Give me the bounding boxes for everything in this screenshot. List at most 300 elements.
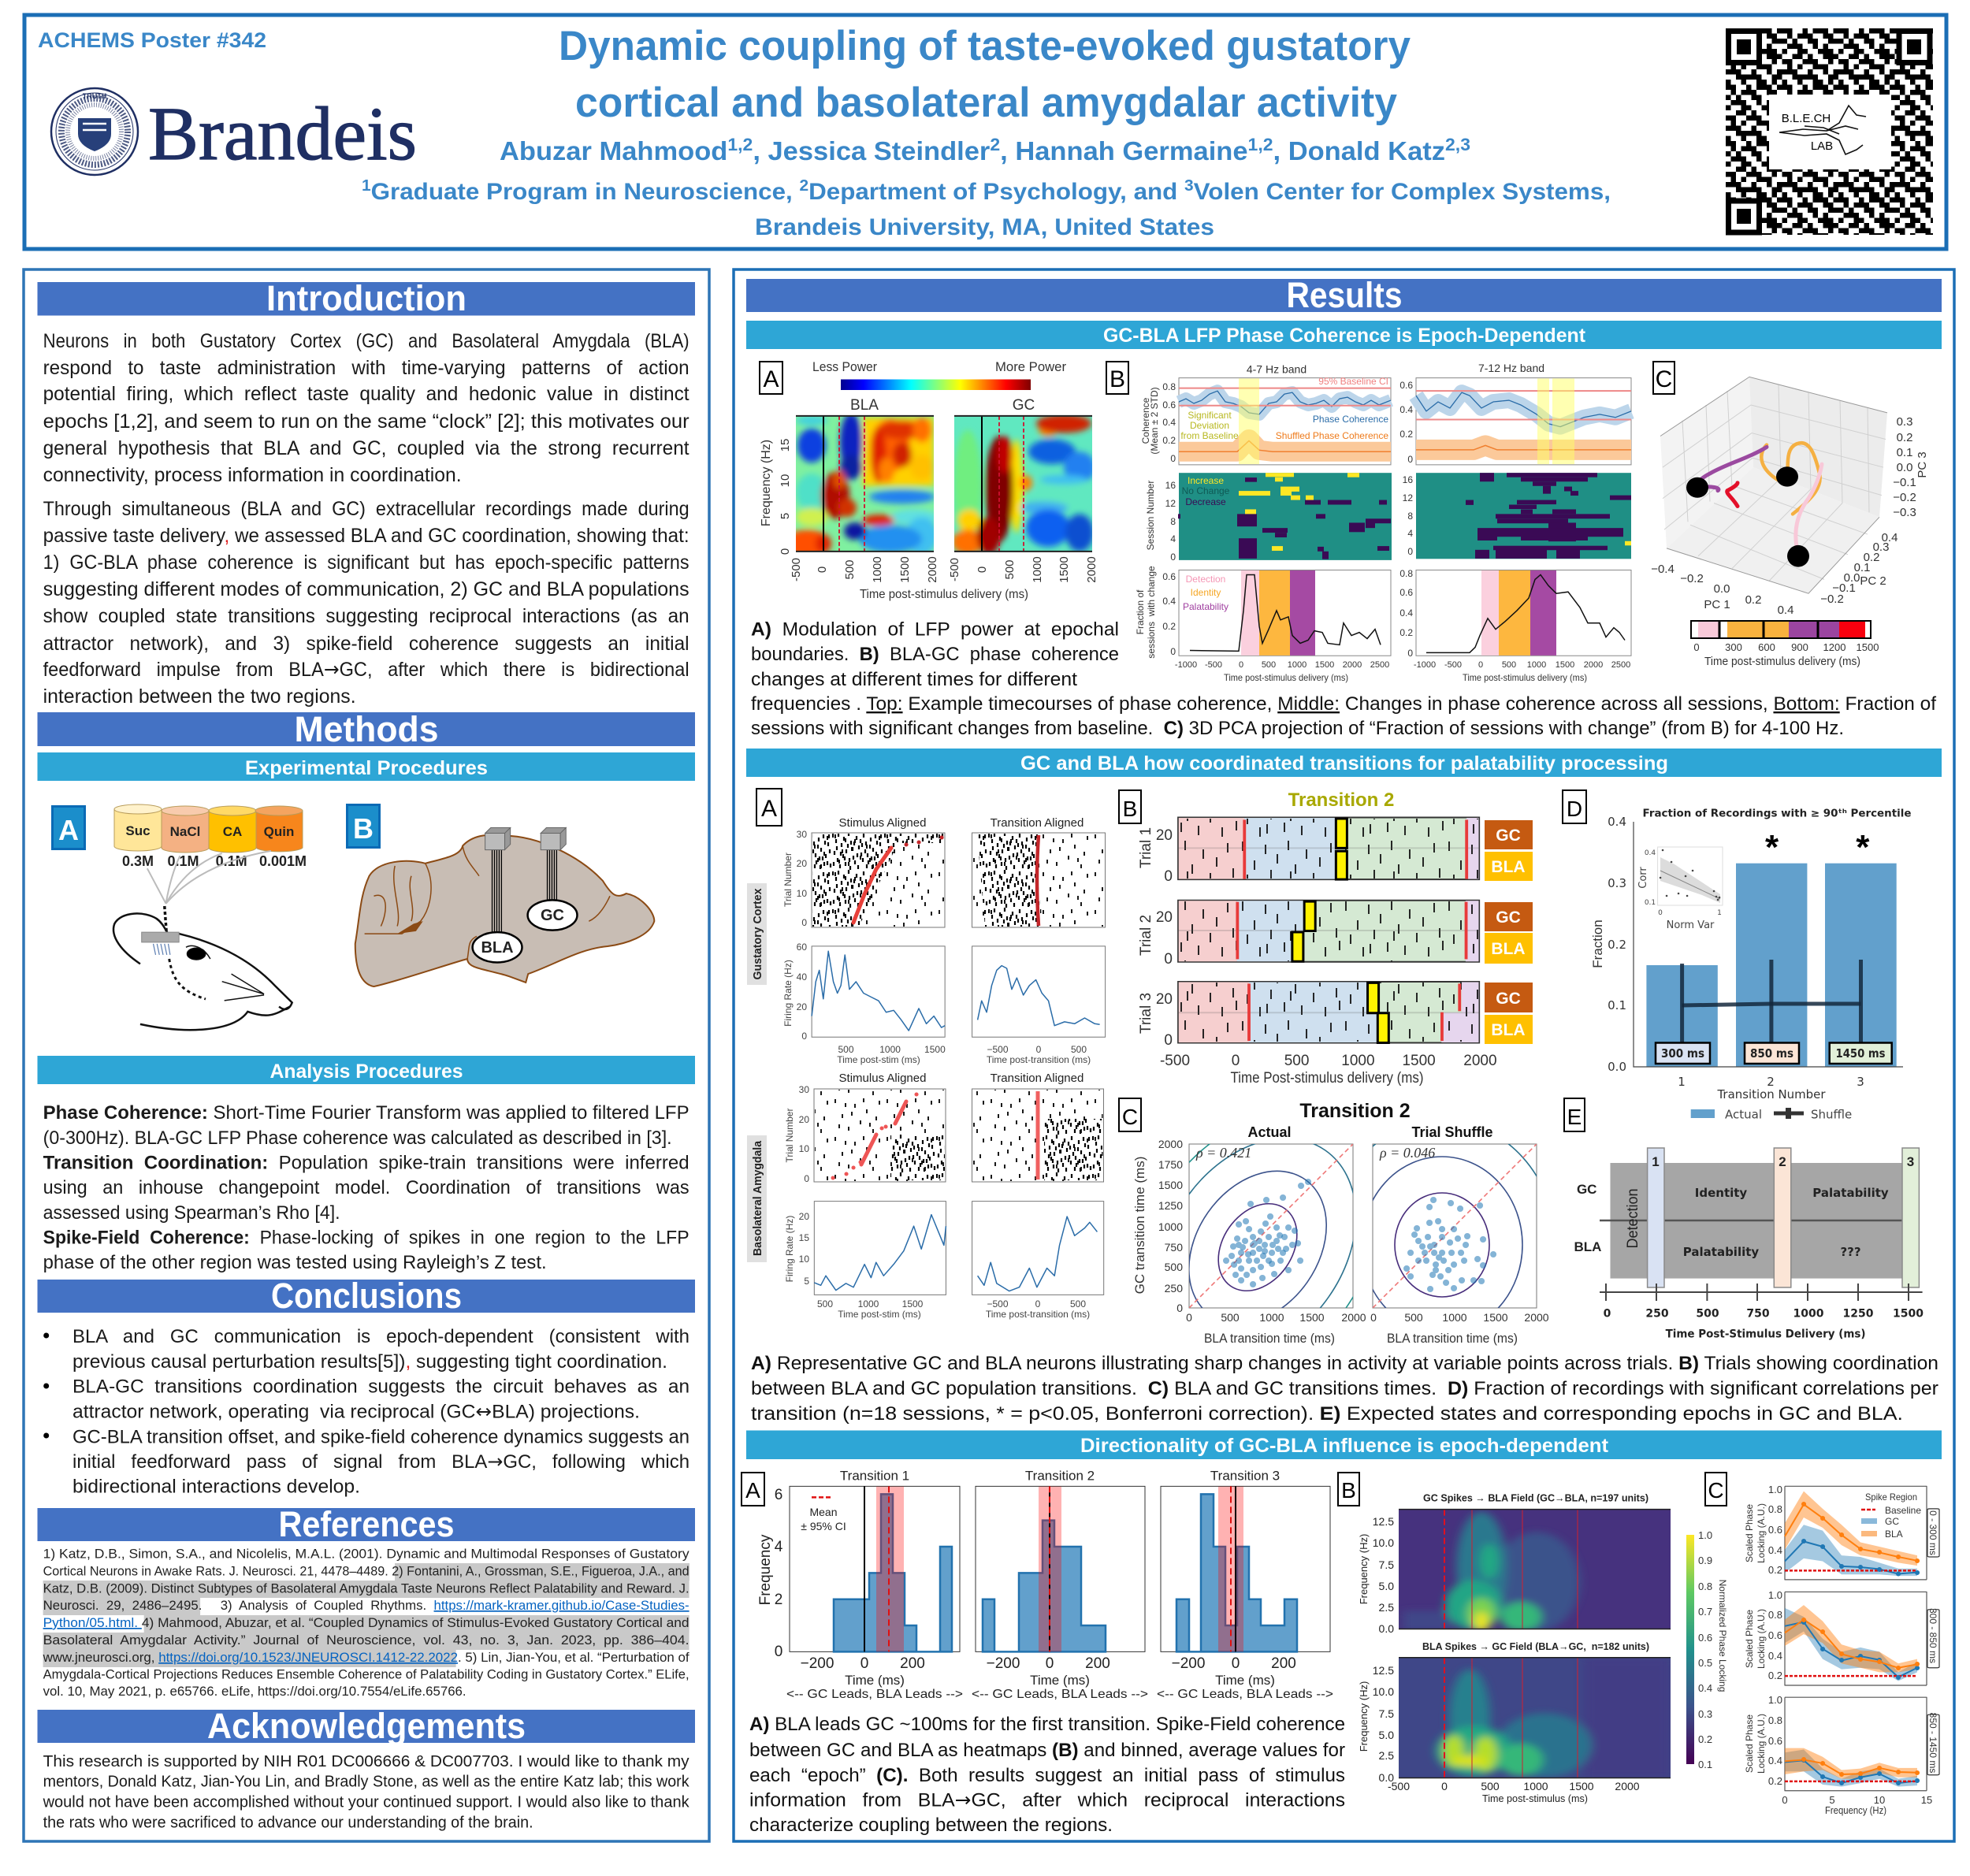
figure: taste delivery rat bbox=[52, 804, 307, 1030]
text: introduction: suggesting different modes of communication, 2) GC and BLA populations bbox=[43, 578, 690, 600]
line plot text and legend: 15 bbox=[1921, 1794, 1932, 1806]
line plot text and legend: 10 bbox=[1874, 1794, 1885, 1806]
text: introduction: general hypothesis that BLA and GC, coupled via the strong recurrent bbox=[43, 437, 690, 459]
line plot text and legend: 0.8 bbox=[1768, 1609, 1782, 1621]
figure 2A: neuron rasters bbox=[747, 789, 1106, 1320]
line plot text and legend: Baseline bbox=[1885, 1505, 1921, 1516]
epoch colorbar: 1200 bbox=[1823, 641, 1845, 653]
heading: introduction bbox=[38, 278, 695, 318]
trial axes text: 0 bbox=[1232, 1053, 1240, 1069]
caption: section 2: transition (n=18 sessions, * = p<0.05, Bonferroni correction). E) Expected states and corresponding epochs in GC and BLA. bbox=[751, 1403, 1903, 1425]
axis labels for heatmaps: 500 bbox=[843, 559, 857, 580]
trial axes text: 20 bbox=[1156, 909, 1173, 926]
affiliations bbox=[362, 177, 1611, 240]
axis text for rasters: 0 bbox=[801, 917, 807, 928]
legend: Shuffle bbox=[1811, 1108, 1852, 1122]
labels for panel B: 1000 bbox=[1288, 660, 1307, 670]
caption: section 3: information from BLA →GC, after which reciprocal interactions bbox=[749, 1789, 1345, 1811]
text: analysis procedures: using an inhouse changepoint model. Coordination of transitions was bbox=[43, 1177, 690, 1198]
line plot text and legend: 300 - 850 ms bbox=[1927, 1608, 1938, 1663]
labels for panel B: 8 bbox=[1407, 511, 1413, 522]
axis text for rasters: 10 bbox=[799, 1254, 809, 1265]
axis labels for heatmaps: 1500 bbox=[1057, 556, 1071, 583]
heatmap text: 12.5 bbox=[1373, 1664, 1394, 1677]
taste cylinders: 0.3M bbox=[122, 853, 154, 869]
labels for panel B: 1500 bbox=[1556, 660, 1574, 670]
affiliations: Volen Center for Complex Systems, bbox=[1194, 179, 1611, 205]
text: introduction: connectivity, process information in coordination. bbox=[43, 464, 462, 486]
BLA heatmap bbox=[796, 414, 934, 552]
time axis: 750 bbox=[1746, 1308, 1770, 1321]
axis text for rasters: 0 bbox=[1035, 1298, 1041, 1309]
PCA axis labels: 0.2 bbox=[1745, 593, 1761, 607]
label A bbox=[760, 362, 782, 394]
affiliations: Graduate Program in Neuroscience, bbox=[371, 179, 799, 205]
legend bbox=[1691, 1108, 1852, 1122]
axis text for rasters bbox=[782, 816, 1091, 1320]
taste cylinders: CA bbox=[223, 824, 242, 839]
title: Dynamic coupling of taste-evoked gustatory bbox=[559, 23, 1411, 69]
figure 1A: LFP power heatmaps bbox=[760, 359, 1098, 601]
epoch time labels: 300 ms bbox=[1661, 1046, 1704, 1061]
labels for panel B: 4 bbox=[1170, 533, 1176, 544]
subheading: coordinated transitions: GC and BLA how coordinated transitions for palatability processing bbox=[1020, 752, 1668, 775]
affiliations: 2 bbox=[799, 177, 808, 195]
heatmap text: Time post-stimulus (ms) bbox=[1482, 1792, 1588, 1804]
label A: A bbox=[58, 814, 79, 846]
labels for panel B: 0.4 bbox=[1162, 596, 1176, 607]
line plot text and legend: Locking (A.U.) bbox=[1756, 1503, 1767, 1563]
text: conclusions list: previous causal perturbation results[5]) , suggesting tight coordination. bbox=[72, 1351, 667, 1373]
labels for panel B: Deviation bbox=[1190, 420, 1229, 431]
normalized phase locking colorbar: 0.9 bbox=[1698, 1555, 1712, 1566]
title: transition 2: Transition 2 bbox=[1288, 789, 1394, 811]
histogram text: −200 bbox=[801, 1655, 834, 1672]
heatmap text: 1000 bbox=[1523, 1780, 1548, 1792]
axis text for rasters: Firing Rate (Hz) bbox=[782, 960, 794, 1027]
labels for panel B: 0.2 bbox=[1399, 627, 1413, 638]
scatter axes text: 1500 bbox=[1158, 1179, 1183, 1191]
axis text for rasters: 1500 bbox=[902, 1298, 924, 1309]
heatmap text: BLA Spikes → GC Field (BLA→GC, n=182 units) bbox=[1422, 1640, 1649, 1652]
caption: section 3: between GC and BLA as heatmaps (B) and binned, average values for bbox=[749, 1740, 1345, 1761]
histogram text: ± 95% CI bbox=[801, 1520, 846, 1532]
heatmap text: 1500 bbox=[1569, 1780, 1594, 1792]
trial axes text: -500 bbox=[1160, 1053, 1190, 1069]
GC/BLA tags: GC bbox=[1496, 990, 1521, 1008]
labels for panel B: 0 bbox=[1478, 660, 1483, 670]
heading: acknowledgements: Acknowledgements bbox=[207, 1706, 526, 1746]
label B: B bbox=[1110, 366, 1125, 392]
labels for panel B: 12 bbox=[1403, 492, 1413, 503]
text: references: www.jneurosci.org, https://doi.org/10.1523/JNEUROSCI.1412-22.2022. 5) Lin, Jian-You, et al. “Perturbation of bbox=[43, 1650, 690, 1665]
figure 2E: epoch schematic bbox=[1564, 1098, 1924, 1341]
label A: A bbox=[761, 796, 777, 822]
labels for panel B: 2000 bbox=[1584, 660, 1603, 670]
axis text for rasters: Time post-stim (ms) bbox=[838, 1309, 921, 1320]
taste cylinders: NaCl bbox=[170, 824, 200, 839]
histogram text: 0 bbox=[775, 1644, 782, 1660]
scatter axes text bbox=[1132, 1138, 1549, 1346]
line plot text and legend: 0 bbox=[1782, 1794, 1788, 1806]
histograms bbox=[790, 1486, 1330, 1651]
affiliations: 3 bbox=[1184, 177, 1194, 195]
labels for panel B: 0.4 bbox=[1162, 417, 1176, 428]
line plot text and legend: Locking (A.U.) bbox=[1756, 1714, 1767, 1774]
scatter axes text: 1500 bbox=[1299, 1311, 1325, 1324]
label B: B bbox=[1123, 797, 1137, 821]
text: introduction: show coupled state transitions suggesting reciprocal interactions (as an bbox=[43, 605, 690, 627]
labels for panel B: 0.8 bbox=[1162, 381, 1176, 392]
scatter titles: Trial Shuffle bbox=[1411, 1124, 1493, 1140]
rat with tubes and electrode bbox=[113, 851, 292, 1030]
text: acknowledgements: mentors, Donald Katz, Jian-You Lin, and Bradly Stone, as well as the entire Katz lab; this work bbox=[43, 1773, 690, 1790]
text: conclusions list: BLA-GC transitions coordination suggests the circuit behaves as an bbox=[72, 1376, 690, 1398]
text: analysis procedures: assessed using Spearman’s Rho [4]. bbox=[43, 1202, 340, 1224]
text: introduction: respond to taste administration with time-varying patterns of action bbox=[43, 357, 690, 379]
heatmap text: 7.5 bbox=[1379, 1707, 1394, 1720]
inset correlation plot: 0.4 bbox=[1645, 849, 1656, 857]
line plot text and legend: 0.2 bbox=[1768, 1775, 1782, 1787]
normalized phase locking colorbar: 1.0 bbox=[1698, 1529, 1712, 1541]
axis labels for heatmaps: Frequency (Hz) bbox=[760, 440, 773, 526]
histogram text: 200 bbox=[1271, 1655, 1296, 1672]
line plot text and legend: 0.6 bbox=[1768, 1629, 1782, 1641]
label C bbox=[1705, 1473, 1727, 1506]
axis text for rasters: 20 bbox=[799, 1211, 809, 1222]
labels for panel B: 500 bbox=[1502, 660, 1516, 670]
label B: B bbox=[1341, 1478, 1356, 1503]
QR code: LAB bbox=[1811, 139, 1833, 153]
labels for panel B: 0.2 bbox=[1399, 429, 1413, 440]
epoch blocks: Identity bbox=[1695, 1186, 1747, 1200]
axis text: 3 bbox=[1857, 1075, 1864, 1089]
text: references: 1) Katz, D.B., Simon, S.A., and Nicolelis, M.A.L. (2001). Dynamic and Multimodal Responses of Gustatory bbox=[43, 1546, 690, 1562]
labels for panel B: 16 bbox=[1165, 480, 1176, 491]
authors: , Jessica Steindler bbox=[753, 136, 991, 165]
histogram text: Time (ms) bbox=[1215, 1673, 1275, 1688]
actual scatter bbox=[1188, 1144, 1354, 1308]
labels for panel B: 0.8 bbox=[1399, 568, 1413, 579]
axis text for rasters: 5 bbox=[804, 1276, 809, 1287]
figure: brain with electrodes bbox=[347, 805, 654, 986]
text: analysis procedures bbox=[43, 1102, 690, 1273]
text: conclusions list bbox=[43, 1326, 690, 1497]
heatmap text: 12.5 bbox=[1373, 1515, 1394, 1528]
trial axes text: 20 bbox=[1156, 827, 1173, 844]
epoch blocks: GC bbox=[1577, 1182, 1596, 1197]
session change rasters bbox=[1178, 473, 1631, 560]
labels for panel B: 500 bbox=[1262, 660, 1276, 670]
line plot text and legend: Locking (A.U.) bbox=[1756, 1609, 1767, 1669]
histogram text: 0 bbox=[1232, 1655, 1240, 1672]
GC/BLA tags: BLA bbox=[1491, 1021, 1526, 1039]
subheading: experimental procedures bbox=[38, 752, 695, 781]
normalized phase locking colorbar: 0.8 bbox=[1698, 1581, 1712, 1592]
caption: section 2: between BLA and GC population transitions. C) BLA and GC transitions times. D) Fraction of recordings with significant correlations per bbox=[751, 1378, 1938, 1399]
line plot text and legend: Scaled Phase bbox=[1744, 1504, 1755, 1562]
labels for panel B: 2000 bbox=[1343, 660, 1362, 670]
trial axes text: Trial 2 bbox=[1138, 915, 1154, 956]
heading: results bbox=[746, 275, 1942, 315]
scatter axes text: BLA transition time (ms) bbox=[1387, 1331, 1518, 1346]
histogram text: Transition 3 bbox=[1210, 1469, 1280, 1483]
axis text for rasters: −500 bbox=[987, 1044, 1009, 1055]
axis text for rasters: 10 bbox=[797, 888, 807, 899]
label C bbox=[1119, 1098, 1141, 1131]
poster number: ACHEMS Poster #342 bbox=[38, 28, 266, 52]
axis text: 1 bbox=[1678, 1075, 1686, 1089]
labels for panel B: Significant bbox=[1188, 410, 1232, 421]
time axis: Time Post-Stimulus Delivery (ms) bbox=[1666, 1328, 1866, 1341]
labels for panel B: 0.6 bbox=[1162, 399, 1176, 410]
heatmap text: 0.0 bbox=[1379, 1622, 1394, 1635]
label B bbox=[1338, 1473, 1359, 1506]
labels for panel B bbox=[1135, 362, 1630, 683]
icon: Brandeis seal: TRUTH bbox=[83, 92, 106, 100]
histogram text: Time (ms) bbox=[1030, 1673, 1090, 1688]
coherence timecourses bbox=[1179, 378, 1631, 465]
heatmap text: 0.0 bbox=[1379, 1771, 1394, 1784]
axis text: 0.2 bbox=[1608, 938, 1626, 952]
axis text for rasters: 20 bbox=[799, 1114, 809, 1125]
labels for panel B: sessions with change bbox=[1146, 566, 1157, 659]
trial axes text: Time Post-stimulus delivery (ms) bbox=[1231, 1070, 1423, 1087]
figure 2B: trial transitions bbox=[1119, 789, 1533, 1087]
text: conclusions list: bidirectional interactions develop. bbox=[72, 1477, 360, 1497]
labels for panel B: 0 bbox=[1170, 646, 1176, 657]
normalized phase locking colorbar: 0.5 bbox=[1698, 1657, 1712, 1669]
normalized phase locking colorbar: 0.3 bbox=[1698, 1708, 1712, 1720]
text: analysis procedures: Spike-Field Coherence: Phase-locking of spikes in one region to the LFP bbox=[43, 1228, 690, 1248]
scatter axes text: 1500 bbox=[1483, 1311, 1508, 1324]
labels for panel B: Decrease bbox=[1185, 496, 1226, 507]
trial plots bbox=[1178, 818, 1479, 1043]
caption: section 1 bbox=[751, 619, 1936, 739]
authors: 1,2 bbox=[727, 135, 753, 154]
subheading: phase coherence: GC-BLA LFP Phase Coherence is Epoch-Dependent bbox=[1103, 325, 1586, 347]
label C bbox=[1653, 362, 1674, 394]
label B: B bbox=[353, 812, 374, 845]
epoch blocks bbox=[1574, 1148, 1920, 1287]
text: conclusions list: BLA and GC communication is epoch-dependent (consistent with bbox=[72, 1326, 690, 1347]
normalized phase locking colorbar: 0.7 bbox=[1698, 1606, 1712, 1618]
line plot text and legend: Scaled Phase bbox=[1744, 1610, 1755, 1668]
GC to BLA heatmap bbox=[1399, 1510, 1671, 1633]
text: conclusions list: GC-BLA transition offset, and spike-field coherence dynamics suggests an bbox=[72, 1426, 690, 1448]
subheading: analysis procedures: Analysis Procedures bbox=[269, 1061, 463, 1083]
scatter axes text: 750 bbox=[1165, 1241, 1183, 1254]
labels for panel B: 0 bbox=[1407, 454, 1413, 465]
text: references: Neurosci. 29, 2486–2495. 3) Analysis of Coupled Rhythms. https://mark-kramer.github.io/Case-Studies- bbox=[43, 1598, 690, 1613]
epoch colorbar: 1500 bbox=[1857, 641, 1879, 653]
histogram text: Transition 1 bbox=[840, 1469, 909, 1483]
axis text for rasters: 15 bbox=[799, 1232, 809, 1243]
heatmap text: 0 bbox=[1441, 1780, 1448, 1792]
scatter axes text: ρ = 0.046 bbox=[1379, 1145, 1435, 1161]
normalized phase locking colorbar: 0.1 bbox=[1698, 1759, 1712, 1770]
axis text for rasters: Trial Number bbox=[784, 1109, 795, 1162]
axis text for rasters: 1000 bbox=[879, 1044, 901, 1055]
text: introduction: interaction between the two regions. bbox=[43, 685, 356, 708]
label D bbox=[1563, 790, 1586, 823]
subheading: coordinated transitions bbox=[746, 749, 1942, 777]
GC/BLA tags: GC bbox=[1496, 908, 1521, 927]
caption: section 1: changes at different times for different bbox=[751, 669, 1077, 690]
heading: methods: Methods bbox=[295, 709, 438, 749]
histogram text: −200 bbox=[1172, 1655, 1205, 1672]
PCA axis labels: 0.0 bbox=[1897, 461, 1912, 474]
epoch blocks: 1 bbox=[1652, 1154, 1660, 1169]
trial axes text: 500 bbox=[1284, 1053, 1309, 1069]
text: acknowledgements: would not have been accomplished without your continued support. I would also like to thank bbox=[43, 1793, 690, 1811]
axis text for rasters: 1000 bbox=[858, 1298, 879, 1309]
histogram text: 200 bbox=[900, 1655, 925, 1672]
PCA axis labels: −0.2 bbox=[1680, 572, 1704, 585]
line plot text and legend: 0.4 bbox=[1768, 1755, 1782, 1766]
figure 3B: spike-field heatmaps bbox=[1338, 1473, 1728, 1804]
caption: section 3: each “epoch” (C). Both results suggest an initial pass of stimulus bbox=[749, 1765, 1345, 1786]
taste cylinders: Suc bbox=[125, 823, 151, 838]
axis text for rasters: Stimulus Aligned bbox=[839, 816, 926, 830]
scatter axes text: 500 bbox=[1221, 1311, 1240, 1324]
heading: references: References bbox=[279, 1504, 454, 1544]
figure 3A: lag histograms bbox=[742, 1469, 1333, 1701]
significance stars bbox=[1765, 828, 1870, 867]
labels for panel B: Shuffled Phase Coherence bbox=[1276, 430, 1388, 441]
heatmap text: -500 bbox=[1388, 1780, 1410, 1792]
labels for panel B: 0.6 bbox=[1399, 380, 1413, 391]
labels for panel B: 8 bbox=[1170, 516, 1176, 527]
authors: , Donald Katz bbox=[1273, 136, 1445, 165]
axis text for rasters: Transition Aligned bbox=[991, 1072, 1084, 1085]
PCA axis labels: 0.2 bbox=[1864, 551, 1879, 564]
caption: section 3 bbox=[749, 1714, 1345, 1836]
PCA axis labels: 0.1 bbox=[1897, 446, 1912, 459]
label A bbox=[756, 789, 782, 826]
axis labels for heatmaps: GC bbox=[1013, 397, 1035, 414]
trial axes text: 20 bbox=[1156, 991, 1173, 1008]
text: analysis procedures: (0-300Hz). BLA-GC LFP Phase coherence was calculated as described in [3]. bbox=[43, 1127, 672, 1149]
heading: conclusions: Conclusions bbox=[271, 1276, 462, 1316]
line plot text and legend: 0.2 bbox=[1768, 1670, 1782, 1681]
text: references: vol. 10, May 2021, p. e65766. eLife, https://doi.org/10.7554/eLife.65766. bbox=[43, 1684, 466, 1699]
labels for panel B: Time post-stimulus delivery (ms) bbox=[1224, 672, 1348, 683]
trial axes text: Trial 1 bbox=[1138, 827, 1154, 868]
region labels: BLA bbox=[481, 939, 514, 957]
labels for panel B: Coherence bbox=[1140, 397, 1151, 444]
axis text: Fraction bbox=[1590, 919, 1605, 968]
axis text for rasters: 30 bbox=[799, 1084, 809, 1095]
firing rate plots bbox=[812, 946, 1106, 1295]
histogram text: 200 bbox=[1085, 1655, 1110, 1672]
axis text for rasters: 20 bbox=[797, 858, 807, 869]
PCA axis labels: −0.3 bbox=[1893, 506, 1916, 519]
time axis: 1500 bbox=[1893, 1308, 1924, 1321]
histogram text: 6 bbox=[775, 1487, 782, 1503]
text: references: Cortical Neurons in Awake Rats. J. Neurosci. 21, 4478–4489. 2) Fontanini, A., Grossman, S.E., Figueroa, J.A., and bbox=[43, 1563, 690, 1579]
labels for panel B: -500 bbox=[1205, 660, 1222, 670]
text: introduction bbox=[43, 330, 690, 708]
epoch time labels: 1450 ms bbox=[1836, 1046, 1886, 1061]
time axis: 500 bbox=[1696, 1308, 1719, 1321]
labels for panel B: -1000 bbox=[1175, 660, 1197, 670]
text: references: Python/05.html. 4) Mahmood, Abuzar, et al. “Coupled Dynamics of Stimulus-Evoked Gustatory Cortical and bbox=[43, 1615, 690, 1630]
heatmap text: 10.0 bbox=[1373, 1536, 1394, 1549]
logo wordmark: Brandeis bbox=[148, 91, 417, 176]
axis text for rasters: Time post-stim (ms) bbox=[837, 1054, 920, 1065]
labels for panel B: Session Number bbox=[1145, 481, 1156, 550]
taste cylinders bbox=[114, 804, 307, 869]
PCA axis labels bbox=[1651, 415, 1929, 617]
labels for panel B: 2500 bbox=[1370, 660, 1389, 670]
line plot text and legend: Spike Region bbox=[1865, 1492, 1917, 1503]
region tag: basolateral amygdala: Basolateral Amygdala bbox=[751, 1140, 764, 1256]
epoch blocks: ??? bbox=[1840, 1245, 1861, 1259]
axis labels for heatmaps: 5 bbox=[779, 513, 792, 519]
label C: C bbox=[1656, 366, 1672, 392]
axis text: 2 bbox=[1767, 1075, 1775, 1089]
shuffle line with error bars bbox=[1682, 960, 1861, 1044]
epoch colorbar bbox=[1691, 621, 1879, 668]
QR code: B.L.E.CH bbox=[1782, 112, 1831, 125]
line plot text and legend: GC bbox=[1885, 1516, 1899, 1527]
epoch blocks: Detection bbox=[1625, 1188, 1641, 1248]
label A bbox=[52, 807, 85, 849]
axis labels for heatmaps: 2000 bbox=[926, 556, 939, 583]
taste cylinders: 0.1M bbox=[216, 853, 247, 869]
GC/BLA tags: GC bbox=[1496, 827, 1521, 845]
taste cylinders: Quin bbox=[264, 824, 294, 839]
histogram text: Frequency bbox=[757, 1534, 774, 1605]
normalized phase locking colorbar: 0.6 bbox=[1698, 1632, 1712, 1644]
trial axes text: 0 bbox=[1164, 1032, 1173, 1049]
scatter axes text: 2000 bbox=[1341, 1311, 1366, 1324]
line plot text and legend: 1.0 bbox=[1768, 1484, 1782, 1495]
scatter axes text: GC transition time (ms) bbox=[1132, 1157, 1147, 1294]
trial axes text: 2000 bbox=[1463, 1053, 1497, 1069]
labels for panel B: 0 bbox=[1407, 546, 1413, 557]
labels for panel B: Time post-stimulus delivery (ms) bbox=[1463, 672, 1587, 683]
label B bbox=[347, 805, 380, 848]
subheading: phase coherence bbox=[746, 321, 1942, 349]
caption: section 1: boundaries. B) BLA-GC phase coherence bbox=[751, 644, 1119, 665]
scatter axes text: 1000 bbox=[1259, 1311, 1284, 1324]
legend: Actual bbox=[1725, 1108, 1762, 1122]
rasters bbox=[812, 833, 1105, 1182]
heading: methods bbox=[38, 709, 695, 749]
subheading: experimental procedures: Experimental Procedures bbox=[245, 757, 488, 779]
inset correlation plot: 1 bbox=[1717, 909, 1722, 917]
text: acknowledgements: This research is supported by NIH R01 DC006666 & DC007703. I would like to thank my bbox=[43, 1753, 690, 1770]
line plot text and legend: Frequency (Hz) bbox=[1825, 1804, 1886, 1816]
label A bbox=[742, 1473, 764, 1506]
axis text: Transition Number bbox=[1717, 1087, 1826, 1101]
figure 1C: 3D PCA bbox=[1651, 362, 1929, 668]
PCA axis labels: PC 1 bbox=[1704, 598, 1730, 611]
trial axes text: 0 bbox=[1164, 868, 1173, 885]
PCA axis labels: PC 3 bbox=[1916, 451, 1929, 478]
label E: E bbox=[1567, 1105, 1582, 1129]
axis text: 0.0 bbox=[1608, 1060, 1626, 1074]
labels for panel B: Phase Coherence bbox=[1313, 414, 1388, 425]
text: analysis procedures: Transition Coordination: Population spike-train transitions were inferred bbox=[43, 1152, 690, 1174]
3D trajectory bbox=[1660, 377, 1887, 593]
GC/BLA tags: BLA bbox=[1491, 940, 1526, 958]
axis labels for heatmaps: BLA bbox=[850, 397, 879, 414]
figure 2D: fraction bar chart bbox=[1563, 790, 1912, 1122]
scatter axes text: 1250 bbox=[1158, 1199, 1183, 1212]
